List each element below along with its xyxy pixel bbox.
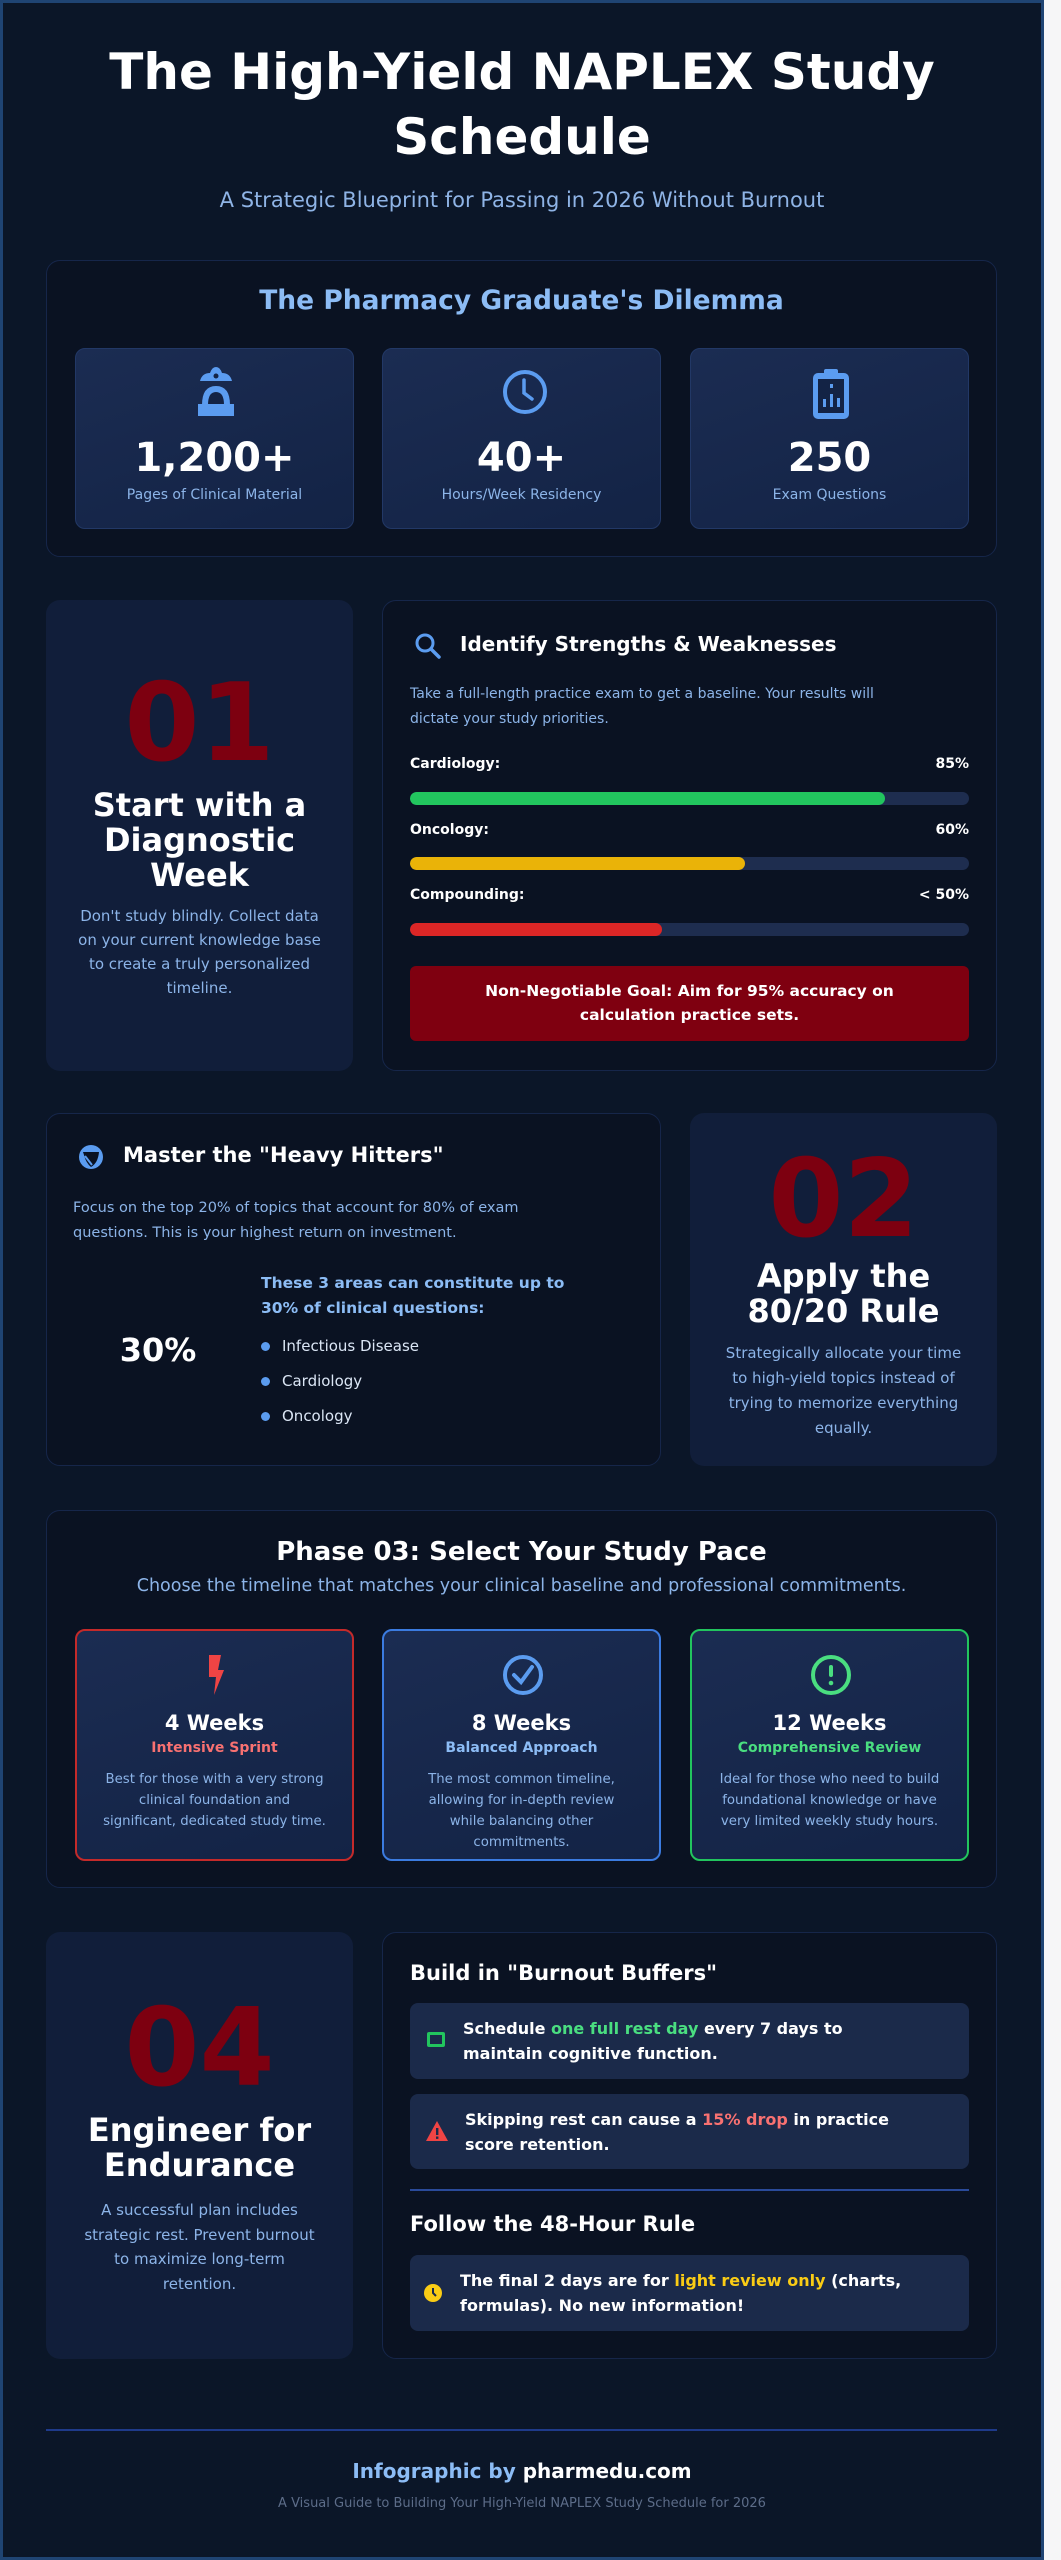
big number 02: 02 — [768, 1137, 919, 1262]
label compounding: < 50% — [919, 887, 969, 903]
text: endurance desc: A successful plan includes strategic rest. Prevent burnout to maximize long-term retention. — [84, 2201, 315, 2292]
text: strengths desc: Take a full-length practice exam to get a baseline. Your results will — [410, 686, 874, 702]
heading: diagnostic week: Week — [150, 856, 249, 894]
callout: final 2 days: The final 2 days are for light review only (charts, — [460, 2271, 901, 2290]
list: areas: Infectious Disease — [282, 1337, 419, 1355]
callout: skipping rest: Skipping rest can cause a 15% drop in practice — [465, 2110, 889, 2129]
heading: 80/20 — [748, 1257, 939, 1330]
card: 8 weeks: Balanced Approach — [445, 1740, 598, 1756]
icon: warning — [426, 2121, 448, 2141]
card: 4 weeks — [75, 1629, 354, 1861]
heading: endurance: Endurance — [104, 2146, 295, 2184]
callout: goal: calculation practice sets. — [580, 1006, 799, 1024]
callout: rest day — [410, 2003, 969, 2079]
text: three areas — [261, 1274, 564, 1317]
card: 8 weeks: allowing for in-depth review — [429, 1793, 614, 1808]
icon: clock — [503, 370, 547, 414]
panel: heavy hitters — [46, 1113, 661, 1466]
card: 8 weeks — [382, 1629, 661, 1861]
callout: goal: Non-Negotiable Goal: Aim for 95% accuracy on — [485, 982, 894, 1000]
text: phase subtitle: Choose the timeline that matches your clinical baseline and professional commitments. — [137, 1576, 906, 1596]
text: heavy hitters desc — [73, 1200, 518, 1241]
label cardiology: 85% — [935, 756, 969, 772]
heading: diagnostic week: Start with a — [93, 786, 306, 824]
icon: check — [503, 1655, 543, 1695]
panel: burnout buffers — [382, 1932, 997, 2359]
list: areas: Cardiology — [282, 1372, 362, 1390]
card: 8 weeks: 8 Weeks — [472, 1711, 571, 1735]
title — [109, 43, 935, 166]
card: 8 weeks: commitments. — [473, 1835, 570, 1850]
list: areas — [261, 1337, 419, 1425]
callout: final 2 days — [410, 2255, 969, 2331]
icon: scale — [198, 367, 234, 416]
icon: alert — [811, 1655, 851, 1695]
title: The High-Yield NAPLEX Study — [109, 43, 935, 101]
callout: final 2 days: formulas). No new information! — [460, 2296, 744, 2315]
heading: strengths: Identify Strengths & Weaknesses — [460, 632, 836, 656]
stat card: questions — [690, 348, 969, 529]
heading: phase 03: Phase 03: Select Your Study Pace — [276, 1537, 767, 1567]
bar compounding — [410, 923, 969, 936]
subtitle: A Strategic Blueprint for Passing in 2026 Without Burnout — [220, 188, 824, 212]
stat card: hours — [382, 348, 661, 529]
callout: goal — [410, 966, 969, 1041]
icon: clipboard — [813, 369, 849, 419]
panel: step 04 — [46, 1932, 353, 2359]
text: 80/20 desc: Strategically allocate your time to high-yield topics instead of trying to memorize everything equally. — [726, 1344, 961, 1437]
heading: endurance: Engineer for — [88, 2111, 311, 2149]
list: areas: Oncology — [282, 1407, 352, 1425]
stat card: pages — [75, 348, 354, 529]
label cardiology — [410, 756, 969, 772]
title: Schedule — [393, 108, 651, 166]
label compounding: Compounding: — [410, 887, 524, 903]
text: heavy hitters desc: Focus on the top 20% of topics that account for 80% of exam — [73, 1200, 518, 1216]
card: 12 weeks: foundational knowledge or have — [722, 1793, 937, 1808]
stat card: pages: Pages of Clinical Material — [127, 487, 302, 503]
label oncology: Oncology: — [410, 822, 489, 838]
card: 8 weeks: while balancing other — [450, 1814, 593, 1829]
card: 4 weeks: Intensive Sprint — [151, 1740, 278, 1756]
heading: diagnostic week: Diagnostic — [104, 821, 295, 859]
footer tagline: A Visual Guide to Building Your High-Yield NAPLEX Study Schedule for 2026 — [278, 2496, 766, 2511]
callout: rest day: Schedule one full rest day every 7 days to — [463, 2019, 843, 2038]
stat card: pages: 1,200+ — [134, 435, 295, 481]
label cardiology: Cardiology: — [410, 756, 500, 772]
text: strengths desc — [410, 686, 874, 727]
card: 12 weeks: very limited weekly study hours. — [721, 1814, 938, 1829]
card: 12 weeks — [690, 1629, 969, 1861]
icon: search — [416, 634, 441, 659]
card: 4 weeks: Best for those with a very strong — [105, 1772, 324, 1787]
callout: rest day: maintain cognitive function. — [463, 2044, 718, 2063]
heading: 48-hour rule: Follow the 48-Hour Rule — [410, 2212, 695, 2236]
stat: 30%: 30% — [120, 1331, 196, 1369]
label oncology: 60% — [935, 822, 969, 838]
heading: 80/20: Apply the — [757, 1257, 930, 1295]
text: heavy hitters desc: questions. This is your highest return on investment. — [73, 1225, 457, 1241]
heading: diagnostic week — [93, 786, 306, 894]
icon: bolt — [209, 1655, 224, 1695]
card: 12 weeks: 12 Weeks — [773, 1711, 886, 1735]
bar chart: scores — [410, 756, 969, 936]
text: three areas: These 3 areas can constitute up to — [261, 1274, 564, 1292]
heading: endurance — [88, 2111, 312, 2184]
panel: step 02 — [690, 1113, 997, 1466]
heading: dilemma: The Pharmacy Graduate's Dilemma — [259, 285, 784, 316]
card: 12 weeks: Ideal for those who need to build — [720, 1772, 939, 1787]
heading: burnout buffers: Build in "Burnout Buffers" — [410, 1961, 717, 1985]
callout: skipping rest — [410, 2094, 969, 2169]
card: 4 weeks: significant, dedicated study time. — [103, 1814, 326, 1829]
text: three areas: 30% of clinical questions: — [261, 1299, 485, 1317]
text: strengths desc: dictate your study priorities. — [410, 711, 609, 727]
stat card: questions: Exam Questions — [773, 487, 886, 503]
big number 01: 01 — [124, 661, 275, 786]
stat card: questions: 250 — [788, 435, 871, 481]
stat card: hours: Hours/Week Residency — [442, 487, 601, 503]
panel: phase 03 — [46, 1510, 997, 1888]
card: 4 weeks: 4 Weeks — [165, 1711, 264, 1735]
label compounding — [410, 887, 969, 903]
callout: skipping rest: score retention. — [465, 2135, 610, 2154]
label oncology — [410, 822, 969, 838]
panel: strengths & weaknesses — [382, 600, 997, 1071]
stat card: hours: 40+ — [477, 435, 566, 481]
heading: 80/20: 80/20 Rule — [748, 1292, 939, 1330]
bar cardiology — [410, 792, 969, 805]
icon: green square — [427, 2032, 445, 2047]
footer credit: Infographic by pharmedu.com — [352, 2459, 692, 2483]
card: 4 weeks: clinical foundation and — [139, 1793, 290, 1808]
panel: dilemma — [46, 260, 997, 557]
big number 04: 04 — [124, 1986, 275, 2111]
card: 12 weeks: Comprehensive Review — [738, 1740, 921, 1756]
icon: yellow clock — [424, 2284, 442, 2302]
icon: shield — [79, 1145, 103, 1169]
card: 8 weeks: The most common timeline, — [428, 1772, 615, 1787]
panel: step 01 — [46, 600, 353, 1071]
bar oncology — [410, 857, 969, 870]
heading: heavy hitters: Master the "Heavy Hitters" — [123, 1143, 444, 1167]
text: diagnostic desc: Don't study blindly. Collect data on your current knowledge base to create a truly personalized timeline. — [78, 907, 321, 997]
